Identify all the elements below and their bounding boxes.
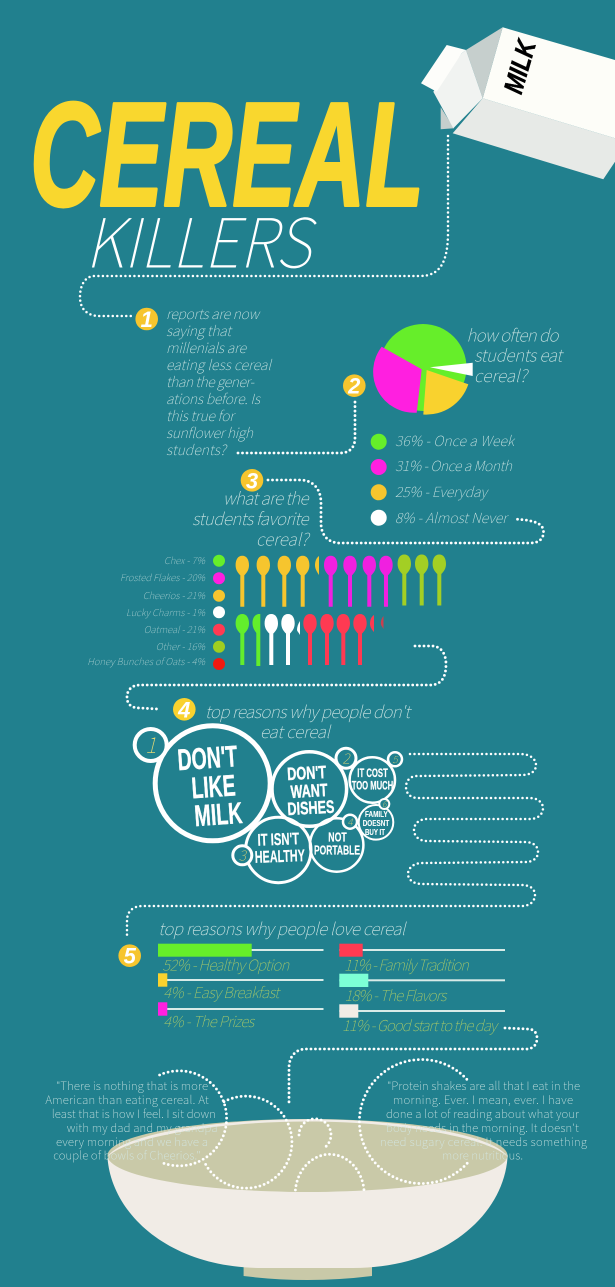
bubble: it cost too much (350, 751, 402, 803)
dotted trail: snake from step 4 to step 5 (127, 754, 543, 938)
bubble: it isn't healthy: HEALTHY (254, 846, 306, 867)
bubble: don't want dishes: DON'T (287, 762, 327, 784)
bubble: it isn't healthy: IT ISN'T (257, 829, 300, 850)
step 4 heading (205, 698, 412, 743)
bubble: don't like milk (135, 726, 270, 841)
quote: left: couple of bowls of Cheerios." (53, 1148, 201, 1164)
cereal legend: Lucky Charms - 1% (126, 605, 206, 619)
cereal legend (87, 553, 225, 670)
bar: the flavors (339, 974, 505, 1006)
cereal legend: Frosted Flakes - 20% (120, 570, 206, 584)
step 4 heading: top reasons why people don't (205, 698, 412, 723)
step 1 intro text: saying that (166, 321, 233, 341)
bubble: don't want dishes: WANT (290, 780, 328, 802)
bar: easy breakfast: 4% - Easy Breakfast (163, 982, 281, 1003)
quote: left (45, 1078, 218, 1164)
step 1 intro text: millenials are (166, 338, 248, 358)
step 3 badge: 3 (246, 468, 258, 493)
bubble: family doesn't buy it: BUY IT (365, 827, 386, 837)
bubble: don't want dishes: DISHES (287, 797, 335, 819)
pie chart (373, 324, 473, 415)
bubble: don't like milk: MILK (193, 797, 244, 833)
bar: the prizes: 4% - The Prizes (163, 1011, 256, 1032)
cereal legend: Honey Bunches of Oats - 4% (87, 654, 206, 668)
quote: left: "There is nothing that is more (56, 1078, 208, 1094)
spoon pictogram row 1 (236, 554, 446, 607)
cereal bowl (108, 1119, 508, 1280)
quote: left: every morning and we have a (56, 1134, 208, 1150)
pie chart question: students eat (474, 342, 564, 366)
pie legend: 36% - Once a Week (395, 431, 516, 451)
milk carton (421, 27, 615, 179)
step 3 heading: what are the (223, 484, 311, 510)
quote: left: least that is how I feel. I sit down (52, 1106, 216, 1122)
step 2 badge: 2 (347, 374, 361, 399)
bubble: it isn't healthy (233, 817, 311, 883)
step 3 heading (192, 484, 311, 550)
pie legend (371, 431, 516, 528)
quote: left: with my dad and my grandpa (67, 1120, 218, 1136)
dotted trail: step 2 to step 3 (268, 480, 544, 543)
bar: good start to the day (339, 1004, 505, 1036)
bubble: not portable: PORTABLE (314, 842, 360, 858)
bar: family tradition: 11% - Family Tradition (344, 954, 470, 976)
step 1 intro text: students? (166, 440, 228, 460)
step 1 intro text: ations before. Is (166, 389, 261, 409)
quote: right: more nutritious. (442, 1148, 523, 1164)
step 3 heading: students favorite (192, 505, 311, 530)
dotted trail: step 1 to step 2 (238, 400, 355, 453)
step 1 intro text: sunflower high (166, 423, 254, 443)
bubble: family doesn't buy it: 6 (382, 799, 387, 810)
step 1 intro text: reports are now (166, 304, 261, 324)
quote: right: "Protein shakes are all that I eat in the (387, 1078, 580, 1094)
step 5 badge (118, 944, 141, 969)
bubble: family doesn't buy it: FAMILY (365, 809, 388, 819)
step 1 intro text (166, 304, 272, 460)
pie legend: 25% - Everyday (395, 482, 489, 502)
step 4 heading: eat cereal (260, 718, 332, 743)
spoon pictogram row 2 (236, 614, 384, 666)
quote: left: American than eating cereal. At (45, 1092, 209, 1108)
dotted trail: step 3 to step 4 (127, 646, 446, 709)
dotted trail: milk to step 1 (80, 136, 448, 316)
dotted loops over bowl (160, 1060, 469, 1190)
carton label: MILK (498, 35, 542, 97)
quote: right (380, 1078, 587, 1164)
bubble: family doesn't buy it (359, 799, 393, 840)
title: KILLERS: KILLERS (85, 188, 317, 288)
quote: right: body needs in the morning. It doesn't (386, 1120, 579, 1136)
bubble: not portable (310, 814, 363, 872)
step 1 badge (135, 307, 158, 332)
bubble: not portable: NOT (328, 830, 347, 845)
bar chart: reasons people love cereal (158, 944, 505, 1036)
cereal legend: Oatmeal - 21% (144, 622, 206, 636)
bubble: it cost too much: 5 (392, 751, 399, 766)
bar: healthy option: 52% - Healthy Option (162, 954, 291, 976)
pie legend: 31% - Once a Month (395, 456, 513, 476)
step 1 intro text: this true for (166, 406, 236, 426)
bubble: it isn't healthy: 3 (239, 846, 248, 866)
bubble: it cost too much: IT COST (357, 766, 388, 780)
bar: easy breakfast (158, 973, 324, 1003)
step 2 badge (343, 374, 366, 399)
bar: good start to the day: 11% - Good start to the day (342, 1015, 499, 1036)
pie chart question: how often do (466, 322, 560, 346)
bubble: don't like milk: DON'T (176, 740, 239, 777)
bubble: don't like milk: 1 (145, 728, 156, 760)
dotted trail: step 5 to bowl (289, 1028, 537, 1102)
bar: the flavors: 18% - The Flavors (344, 985, 448, 1006)
step 5 heading: top reasons why people love cereal (158, 915, 407, 940)
bubble: don't want dishes: 2 (342, 748, 351, 768)
bubble: it cost too much: TOO MUCH (352, 778, 393, 792)
bar: the prizes (158, 1002, 324, 1032)
bar: family tradition (339, 944, 505, 976)
step 3 badge (241, 468, 263, 493)
step 4 badge: 4 (177, 697, 190, 722)
bubble chart: reasons people do not eat cereal (135, 726, 402, 883)
bubble: don't want dishes (272, 748, 356, 826)
bubble: not portable: 4 (347, 814, 353, 828)
bubble: don't like milk: LIKE (190, 769, 237, 805)
step 5 badge: 5 (124, 944, 137, 969)
pie legend: 8% - Almost Never (395, 508, 509, 528)
pie chart question: cereal? (474, 362, 530, 387)
step 1 intro text: eating less cereal (166, 355, 272, 375)
pie chart question (466, 322, 564, 387)
cereal legend: Cheerios - 21% (143, 588, 206, 602)
quote: right: done a lot of reading about what your (386, 1106, 579, 1122)
quote: right: morning. Ever. I mean, ever. I have (393, 1092, 573, 1108)
quote: right: need sugary cereal. It needs something (380, 1134, 587, 1150)
cereal legend: Other - 16% (156, 639, 206, 653)
step 1 badge: 1 (141, 307, 153, 332)
step 1 intro text: than the gener- (166, 372, 254, 392)
bubble: family doesn't buy it: DOESNT (363, 818, 390, 828)
step 3 heading: cereal? (256, 526, 311, 550)
bar: healthy option (158, 944, 324, 976)
step 4 badge (173, 697, 196, 722)
cereal legend: Chex - 7% (164, 553, 206, 567)
